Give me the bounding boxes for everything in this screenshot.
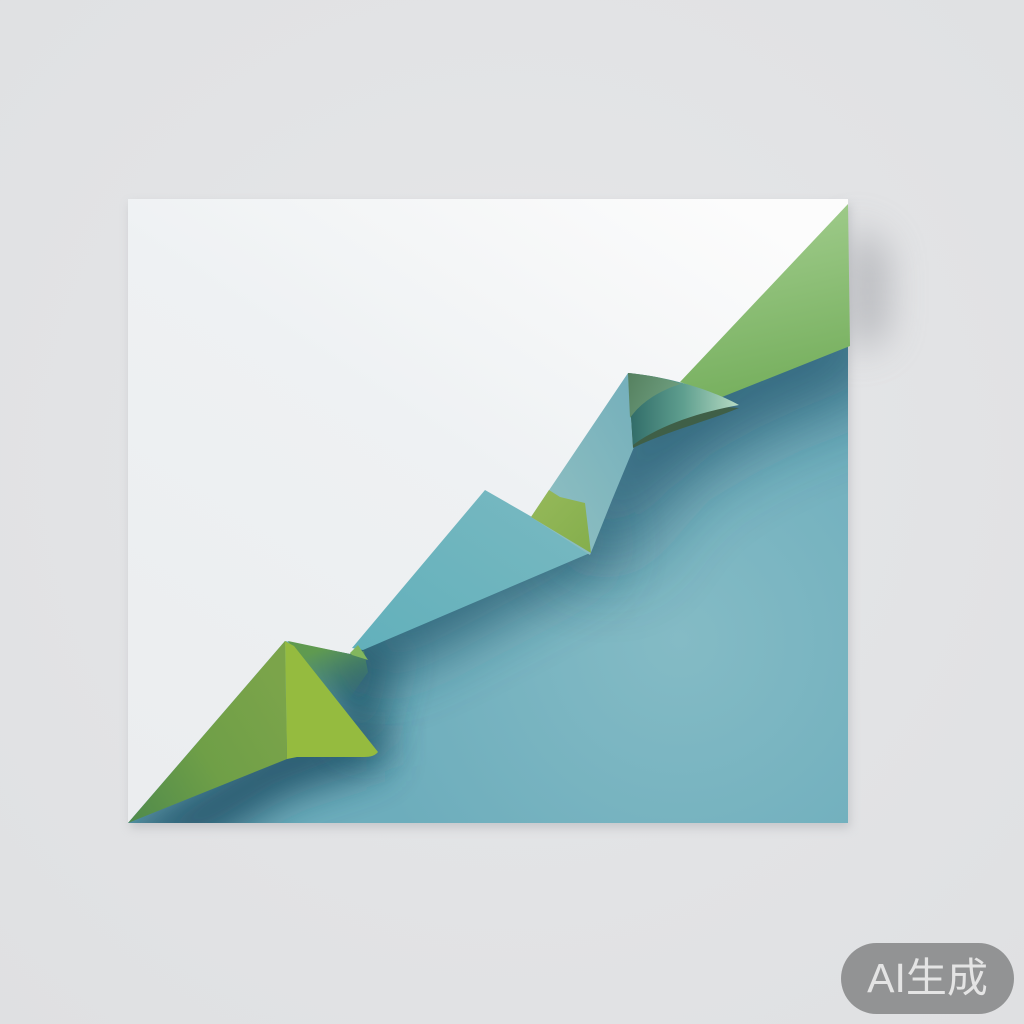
green inset fold (531, 490, 591, 553)
folded paper illustration (127, 199, 904, 831)
upper curled fold (628, 373, 739, 448)
fold shadows (128, 346, 848, 823)
top-right green fold (680, 204, 850, 397)
white paper sheet (128, 199, 848, 823)
badge: AI generated: AI生成 (867, 955, 988, 1001)
teal fold: middle (352, 490, 590, 650)
teal lower panel (128, 346, 848, 823)
badge: AI generated (841, 943, 1014, 1014)
lower green fold (128, 641, 378, 823)
teal fold: upper (531, 373, 634, 555)
card shadow (130, 204, 885, 828)
